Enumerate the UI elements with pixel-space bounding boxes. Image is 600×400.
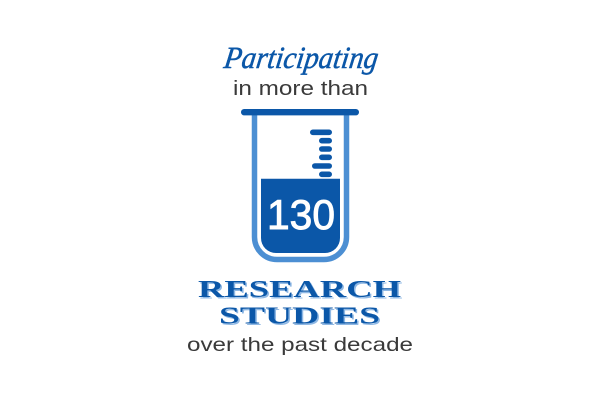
beaker rim [241, 109, 359, 115]
text: over the past decade: over the past decade [187, 334, 413, 356]
icon: beaker [241, 109, 359, 260]
heading: Participating: Participating [221, 40, 381, 75]
beaker glass wall [254, 112, 346, 260]
number: 130: 130 [267, 191, 335, 238]
heading: STUDIES: STUDIES [219, 304, 380, 330]
heading: STUDIES [219, 304, 382, 331]
text: in more than: in more than [233, 78, 368, 100]
heading: RESEARCH: RESEARCH [198, 277, 402, 303]
liquid [261, 179, 340, 253]
heading: STUDIES: STUDIES [220, 305, 382, 331]
heading: RESEARCH [198, 277, 403, 304]
heading: RESEARCH: RESEARCH [200, 278, 403, 304]
measurement ticks [310, 130, 332, 177]
